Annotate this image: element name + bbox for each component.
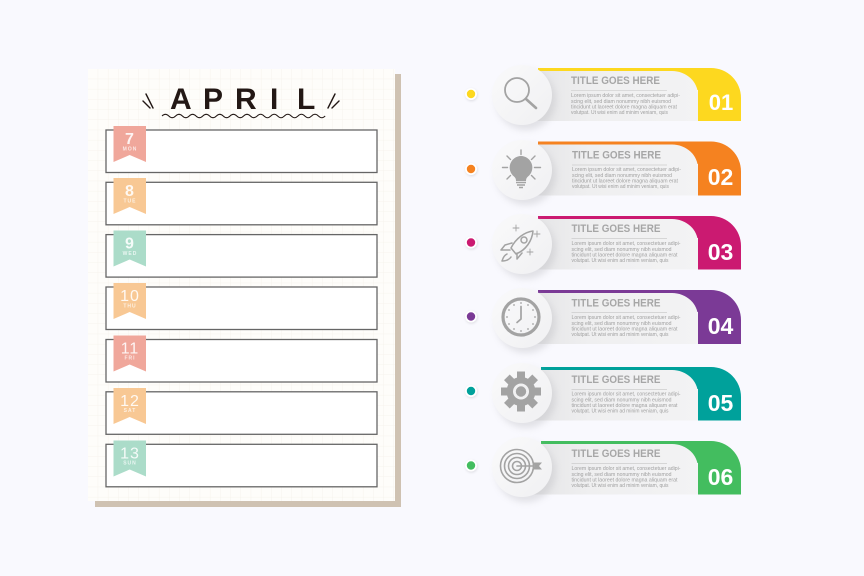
- body text: Lorem ipsum dolor sit amet, consectetuer adipi-: [571, 93, 680, 99]
- panel: April planner: [88, 69, 401, 507]
- title: TITLE GOES HERE: [572, 150, 661, 162]
- grey band: [530, 144, 698, 196]
- body text: [572, 241, 681, 264]
- day row: 12 SAT: SAT: [124, 408, 136, 414]
- icon: light bulb: [492, 140, 556, 205]
- number: 03: [708, 239, 733, 265]
- grey band: [530, 444, 698, 494]
- coloured tab: [538, 216, 741, 270]
- day row: 10 THU: [106, 283, 377, 330]
- step 01: search: [465, 65, 741, 130]
- number: 06: [708, 464, 733, 490]
- title: TITLE GOES HERE: [572, 374, 661, 386]
- title: TITLE GOES HERE: [572, 298, 661, 310]
- day row: 13 SUN: SUN: [123, 460, 137, 466]
- body text: tincidunt ut laoreet dolore magna aliquam erat: [572, 252, 678, 258]
- body text: Lorem ipsum dolor sit amet, consectetuer adipi-: [572, 392, 681, 398]
- body text: Lorem ipsum dolor sit amet, consectetuer adipi-: [572, 315, 681, 321]
- day row: 9 WED: WED: [123, 251, 137, 257]
- day row: 7 MON: 7: [125, 131, 134, 148]
- icon: gear: [492, 363, 556, 428]
- day row: 11 FRI: 11: [121, 340, 139, 358]
- title: TITLE GOES HERE: [571, 75, 660, 87]
- body text: Lorem ipsum dolor sit amet, consectetuer adipi-: [572, 241, 681, 247]
- coloured tab: [538, 290, 741, 344]
- body text: [572, 315, 681, 338]
- title: TITLE GOES HERE: [572, 448, 661, 460]
- grey band: [530, 219, 698, 270]
- title: TITLE GOES HERE: [572, 223, 661, 235]
- day row: 10 THU: THU: [123, 304, 137, 310]
- body text: volutpat. Ut wisi enim ad minim veniam, quis: [572, 409, 669, 415]
- step 02: idea: [465, 140, 741, 205]
- body text: tincidunt ut laoreet dolore magna aliquam erat: [572, 478, 678, 484]
- day row: 8 TUE: [106, 178, 377, 225]
- body text: tincidunt ut laoreet dolore magna aliquam erat: [572, 403, 678, 409]
- body text: scing elit, sed diam nonummy nibh euismod: [572, 397, 672, 403]
- step 06: target: [465, 437, 741, 502]
- marker dot: [465, 163, 478, 176]
- body text: Lorem ipsum dolor sit amet, consectetuer adipi-: [572, 466, 681, 472]
- day row: 11 FRI: [106, 336, 377, 382]
- step 04: time: [465, 288, 741, 353]
- icon: clock: [492, 288, 556, 353]
- body text: tincidunt ut laoreet dolore magna aliquam erat: [571, 104, 677, 110]
- coloured tab: [541, 367, 741, 420]
- day row: 11 FRI: FRI: [124, 356, 136, 362]
- number: 05: [708, 390, 733, 416]
- body text: [572, 167, 681, 190]
- marker dot: [465, 88, 478, 101]
- grey band: [530, 370, 698, 420]
- body text: tincidunt ut laoreet dolore magna aliquam erat: [572, 326, 678, 332]
- grey band: [530, 71, 698, 121]
- day row: 10 THU: 10: [120, 288, 140, 305]
- day row: 8 TUE: 8: [125, 183, 134, 200]
- grey band: [530, 293, 698, 344]
- body text: volutpat. Ut wisi enim ad minim veniam, quis: [572, 258, 669, 264]
- day row: 9 WED: [106, 230, 377, 277]
- body text: [572, 392, 681, 415]
- day row: 13 SUN: [106, 440, 377, 487]
- number: 01: [709, 90, 733, 115]
- day row: 8 TUE: TUE: [124, 198, 136, 204]
- day row: 12 SAT: [106, 388, 377, 434]
- day row: 12 SAT: 12: [120, 393, 140, 410]
- number: 02: [708, 164, 733, 190]
- body text: [572, 466, 681, 489]
- body text: [571, 93, 680, 116]
- body text: scing elit, sed diam nonummy nibh euismod: [572, 173, 672, 179]
- marker dot: [465, 310, 478, 324]
- marker dot: [465, 385, 478, 398]
- body text: volutpat. Ut wisi enim ad minim veniam, quis: [572, 184, 669, 190]
- icon: target and arrow: [492, 437, 556, 502]
- body text: scing elit, sed diam nonummy nibh euismod: [571, 99, 671, 105]
- number: 04: [708, 313, 733, 339]
- body text: scing elit, sed diam nonummy nibh euismod: [572, 472, 672, 478]
- body text: scing elit, sed diam nonummy nibh euismod: [572, 321, 672, 327]
- coloured tab: [541, 441, 741, 494]
- heading: APRIL: APRIL: [170, 83, 315, 116]
- body text: volutpat. Ut wisi enim ad minim veniam, quis: [572, 332, 669, 338]
- day row: 7 MON: [106, 126, 377, 172]
- grid paper: [88, 69, 395, 501]
- body text: tincidunt ut laoreet dolore magna aliquam erat: [572, 178, 678, 184]
- step 03: launch: [465, 214, 741, 279]
- body text: scing elit, sed diam nonummy nibh euismod: [572, 247, 672, 253]
- day row: 7 MON: MON: [123, 146, 137, 152]
- body text: volutpat. Ut wisi enim ad minim veniam, quis: [572, 483, 669, 489]
- coloured tab: [538, 68, 741, 121]
- icon: magnifier: [492, 65, 556, 130]
- body text: volutpat. Ut wisi enim ad minim veniam, quis: [571, 110, 668, 116]
- day row: 13 SUN: 13: [120, 446, 140, 462]
- marker dot: [465, 236, 478, 250]
- day row: 9 WED: 9: [125, 236, 134, 252]
- step 05: settings: [465, 363, 741, 428]
- coloured tab: [538, 142, 741, 196]
- icon: rocket: [492, 214, 556, 279]
- body text: Lorem ipsum dolor sit amet, consectetuer adipi-: [572, 167, 681, 173]
- paper backing shadow: [95, 74, 401, 507]
- marker dot: [465, 460, 478, 472]
